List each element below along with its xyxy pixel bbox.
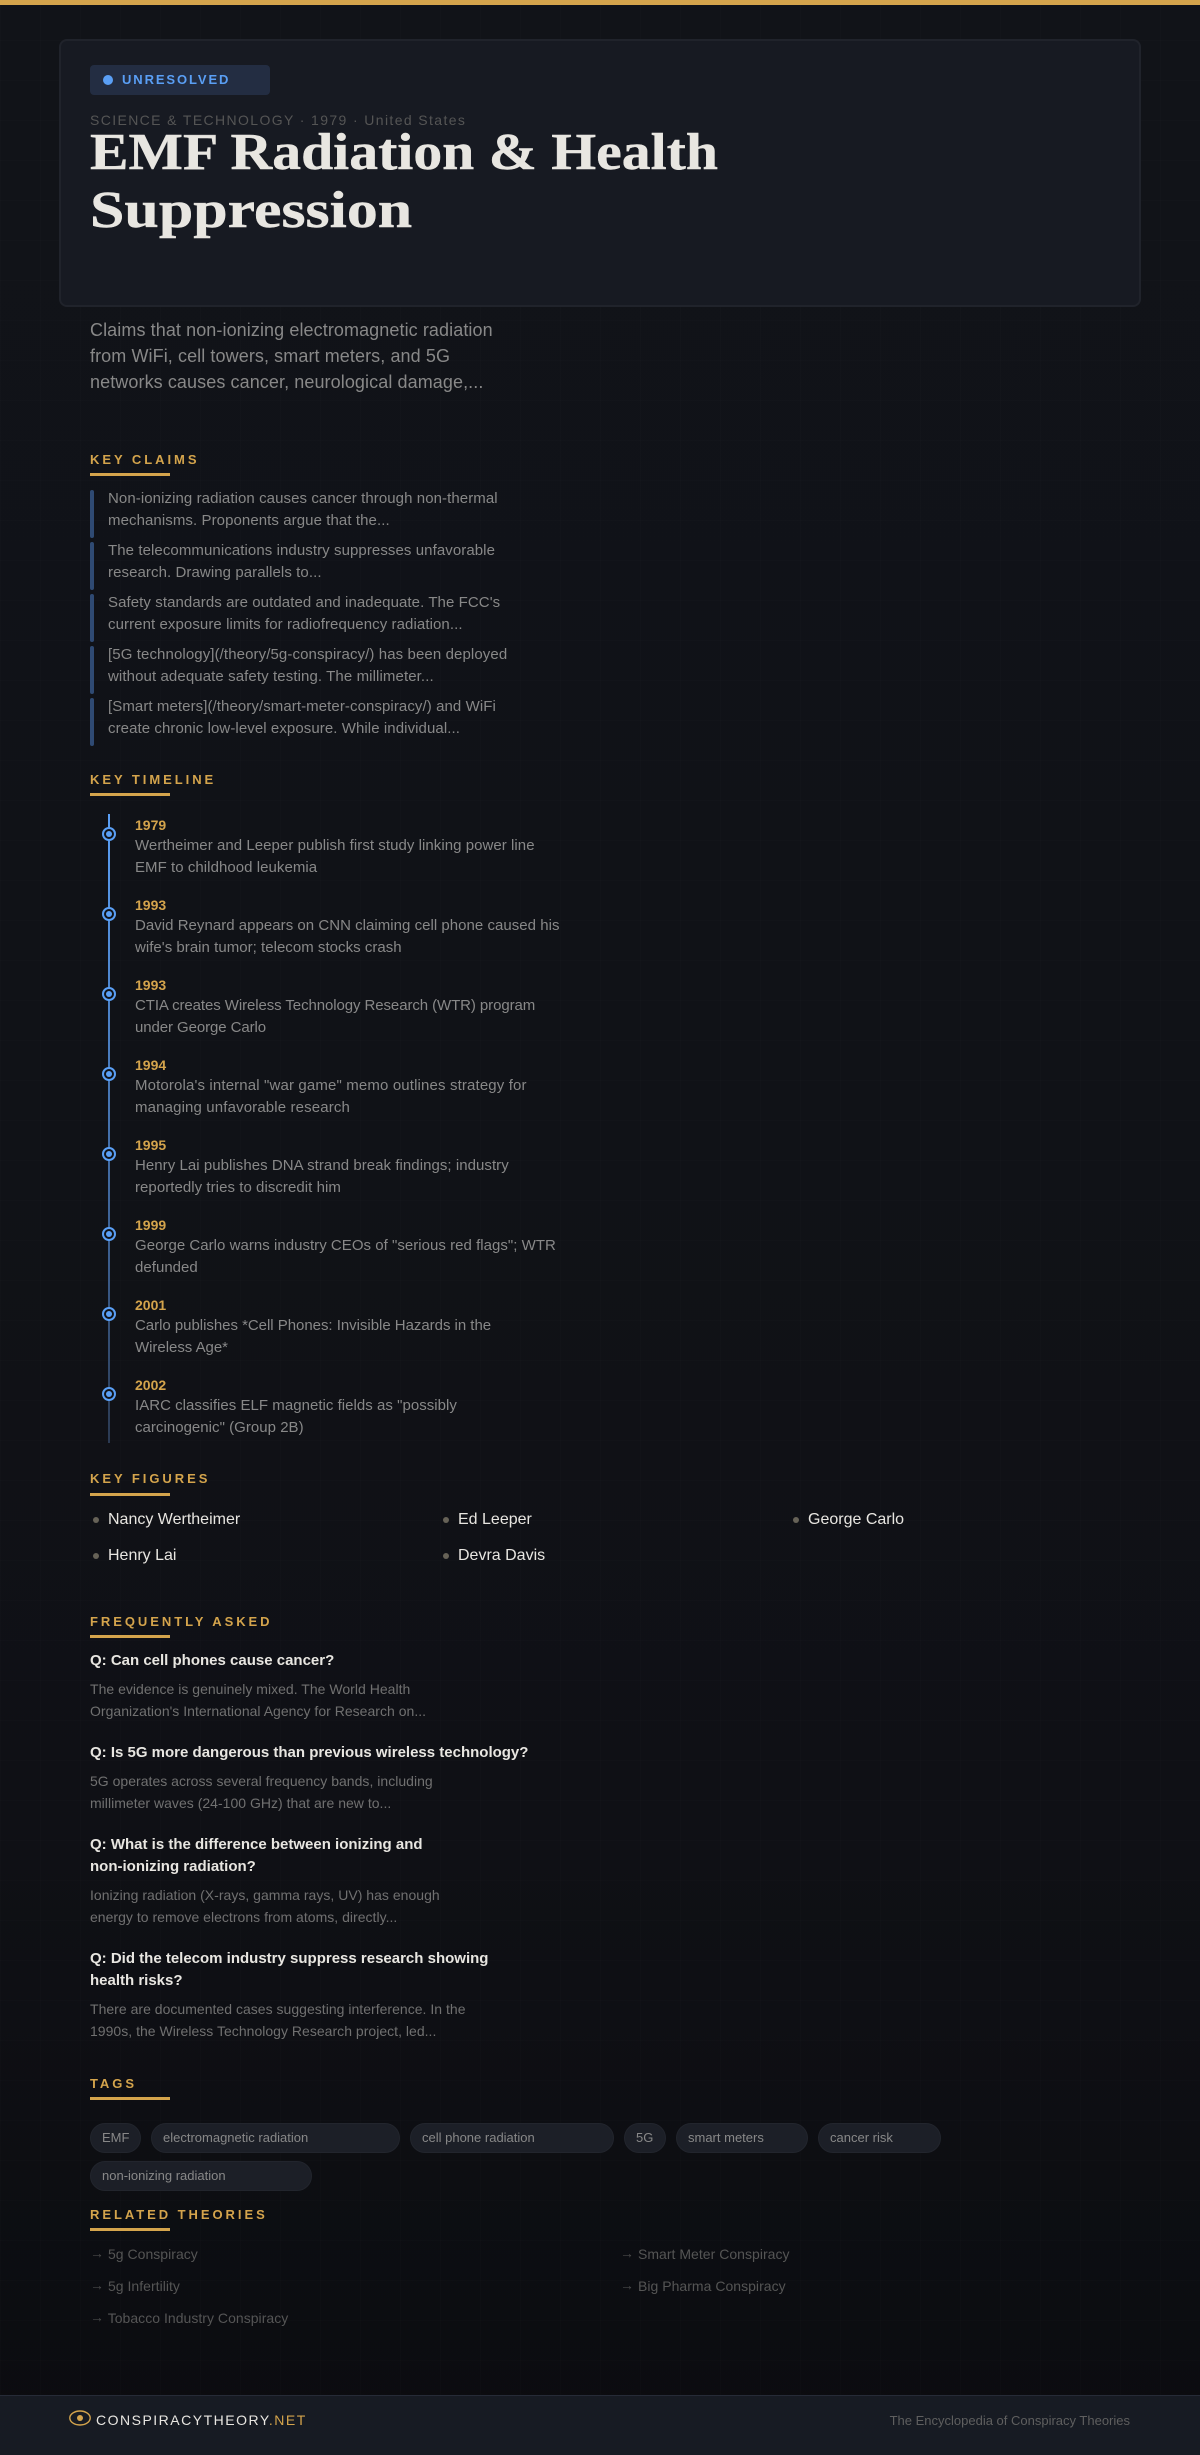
event 1994: Motorola's internal "war game" memo outlines strategy for <box>135 1077 527 1094</box>
claim 2 <box>108 542 495 581</box>
answer 3 <box>90 1887 440 1925</box>
title: EMF Radiation & Health <box>90 124 718 181</box>
tags <box>90 2123 941 2191</box>
question 3: non-ionizing radiation? <box>90 1858 256 1875</box>
tag <box>676 2123 808 2153</box>
event 1994: 1994 <box>135 1057 166 1073</box>
tag <box>151 2123 400 2153</box>
question 3: Q: What is the difference between ionizing and <box>90 1836 423 1853</box>
claim 5 <box>108 698 496 737</box>
event 1993 b: CTIA creates Wireless Technology Research (WTR) program <box>135 997 535 1014</box>
claim 3: Safety standards are outdated and inadequate. The FCC's <box>108 594 500 611</box>
badge label: UNRESOLVED <box>122 72 230 87</box>
link: → Tobacco Industry Conspiracy <box>90 2308 288 2326</box>
answer 4: There are documented cases suggesting interference. In the <box>90 2001 466 2017</box>
key figures list <box>93 1511 904 1564</box>
heading: tags: TAGS <box>90 2076 137 2091</box>
heading: related theories: RELATED THEORIES <box>90 2207 268 2222</box>
event 1993 b: under George Carlo <box>135 1019 266 1036</box>
event 2001: Wireless Age* <box>135 1339 228 1356</box>
answer 2: 5G operates across several frequency bands, including <box>90 1773 433 1789</box>
claim 4: without adequate safety testing. The millimeter... <box>108 668 434 685</box>
claim 1: Non-ionizing radiation causes cancer through non-thermal <box>108 490 498 507</box>
timeline <box>102 814 560 1443</box>
tag <box>90 2161 312 2191</box>
tagline: The Encyclopedia of Conspiracy Theories <box>890 2413 1130 2428</box>
answer 3: energy to remove electrons from atoms, directly... <box>90 1909 397 1925</box>
related theories list <box>90 2244 790 2326</box>
event 1994: managing unfavorable research <box>135 1099 350 1116</box>
link: → 5g Infertility <box>90 2276 180 2294</box>
figure: Henry Lai: Henry Lai <box>108 1547 176 1564</box>
answer 1: Organization's International Agency for Research on... <box>90 1703 426 1719</box>
event 1979: Wertheimer and Leeper publish first study linking power line <box>135 837 535 854</box>
event 2001 <box>102 1297 491 1356</box>
event 1995: reportedly tries to discredit him <box>135 1179 341 1196</box>
event 1993: David Reynard appears on CNN claiming cell phone caused his <box>135 917 560 934</box>
event 1993 b <box>102 977 535 1036</box>
event 1995: 1995 <box>135 1137 166 1153</box>
event 1979: EMF to childhood leukemia <box>135 859 317 876</box>
event 1979: 1979 <box>135 817 166 833</box>
event 2002: 2002 <box>135 1377 166 1393</box>
answer 2 <box>90 1773 433 1811</box>
event 1979 <box>102 817 535 876</box>
panel: hero card <box>59 39 1141 307</box>
answer 3: Ionizing radiation (X-rays, gamma rays, UV) has enough <box>90 1887 440 1903</box>
link: → Smart Meter Conspiracy <box>620 2244 790 2262</box>
tag <box>410 2123 614 2153</box>
status badge <box>90 65 270 95</box>
question 3 <box>90 1836 423 1875</box>
title <box>90 124 718 239</box>
question 4: health risks? <box>90 1972 183 1989</box>
figure: Nancy Wertheimer: Nancy Wertheimer <box>108 1511 240 1528</box>
question 1: Q: Can cell phones cause cancer? <box>90 1652 334 1669</box>
event 1994 <box>102 1057 527 1116</box>
tag: 5G <box>636 2130 653 2145</box>
tag: cell phone radiation <box>422 2130 535 2145</box>
figure: Ed Leeper: Ed Leeper <box>458 1511 532 1528</box>
claim 2: The telecommunications industry suppresses unfavorable <box>108 542 495 559</box>
heading: key figures: KEY FIGURES <box>90 1471 210 1486</box>
event 1999: defunded <box>135 1259 198 1276</box>
claim 5: [Smart meters](/theory/smart-meter-conspiracy/) and WiFi <box>108 698 496 715</box>
event 1993 b: 1993 <box>135 977 166 993</box>
tag <box>624 2123 666 2153</box>
answer 4: 1990s, the Wireless Technology Research project, led... <box>90 2023 436 2039</box>
tag: smart meters <box>688 2130 764 2145</box>
link: → 5g Conspiracy <box>90 2244 198 2262</box>
question 4 <box>90 1950 488 1989</box>
event 2001: 2001 <box>135 1297 166 1313</box>
panel: key claims <box>90 490 507 746</box>
heading: key timeline: KEY TIMELINE <box>90 772 216 787</box>
event 1993: 1993 <box>135 897 166 913</box>
answer 1: The evidence is genuinely mixed. The World Health <box>90 1681 410 1697</box>
event 2002 <box>102 1377 457 1436</box>
event 1993: wife's brain tumor; telecom stocks crash <box>135 939 402 956</box>
event 2001: Carlo publishes *Cell Phones: Invisible Hazards in the <box>135 1317 491 1334</box>
event 2002: carcinogenic" (Group 2B) <box>135 1419 304 1436</box>
tag <box>818 2123 941 2153</box>
question 4: Q: Did the telecom industry suppress research showing <box>90 1950 488 1967</box>
FAQ list <box>90 1652 528 2039</box>
icon: status dot <box>103 75 113 85</box>
event 1999: George Carlo warns industry CEOs of "serious red flags"; WTR <box>135 1237 556 1254</box>
title: Suppression <box>90 182 412 239</box>
claim 3: current exposure limits for radiofrequency radiation... <box>108 616 463 633</box>
event 1995 <box>102 1137 509 1196</box>
summary text: networks causes cancer, neurological damage,... <box>90 372 483 392</box>
tag: non-ionizing radiation <box>102 2168 226 2183</box>
timeline axis <box>108 814 110 1443</box>
tag <box>90 2123 141 2153</box>
answer 2: millimeter waves (24-100 GHz) that are new to... <box>90 1795 391 1811</box>
brand name: CONSPIRACYTHEORY.NET <box>96 2412 307 2428</box>
figure: Devra Davis: Devra Davis <box>458 1547 545 1564</box>
event 1999 <box>102 1217 556 1276</box>
top accent bar <box>0 0 1200 5</box>
question 2: Q: Is 5G more dangerous than previous wireless technology? <box>90 1744 528 1761</box>
answer 1 <box>90 1681 426 1719</box>
link: → Big Pharma Conspiracy <box>620 2276 786 2294</box>
claim 1 <box>108 490 498 529</box>
event 2002: IARC classifies ELF magnetic fields as "possibly <box>135 1397 457 1414</box>
claim 3 <box>108 594 500 633</box>
claim 1: mechanisms. Proponents argue that the... <box>108 512 390 529</box>
event 1993 <box>102 897 560 956</box>
footer <box>0 2395 1200 2455</box>
icon: eye logo <box>69 2410 91 2426</box>
claim 4: [5G technology](/theory/5g-conspiracy/) has been deployed <box>108 646 507 663</box>
claim 4 <box>108 646 507 685</box>
answer 4 <box>90 2001 466 2039</box>
event 1995: Henry Lai publishes DNA strand break findings; industry <box>135 1157 509 1174</box>
tag: cancer risk <box>830 2130 893 2145</box>
meta line: SCIENCE & TECHNOLOGY · 1979 · United States <box>90 112 466 128</box>
figure: George Carlo: George Carlo <box>808 1511 904 1528</box>
tag: EMF <box>102 2130 129 2145</box>
heading: frequently asked: FREQUENTLY ASKED <box>90 1614 273 1629</box>
summary text: Claims that non-ionizing electromagnetic radiation <box>90 320 493 340</box>
summary text <box>90 320 493 392</box>
tag: electromagnetic radiation <box>163 2130 308 2145</box>
heading: key claims: KEY CLAIMS <box>90 452 199 467</box>
summary text: from WiFi, cell towers, smart meters, and 5G <box>90 346 450 366</box>
event 1999: 1999 <box>135 1217 166 1233</box>
claim 2: research. Drawing parallels to... <box>108 564 322 581</box>
claim 5: create chronic low-level exposure. While individual... <box>108 720 460 737</box>
